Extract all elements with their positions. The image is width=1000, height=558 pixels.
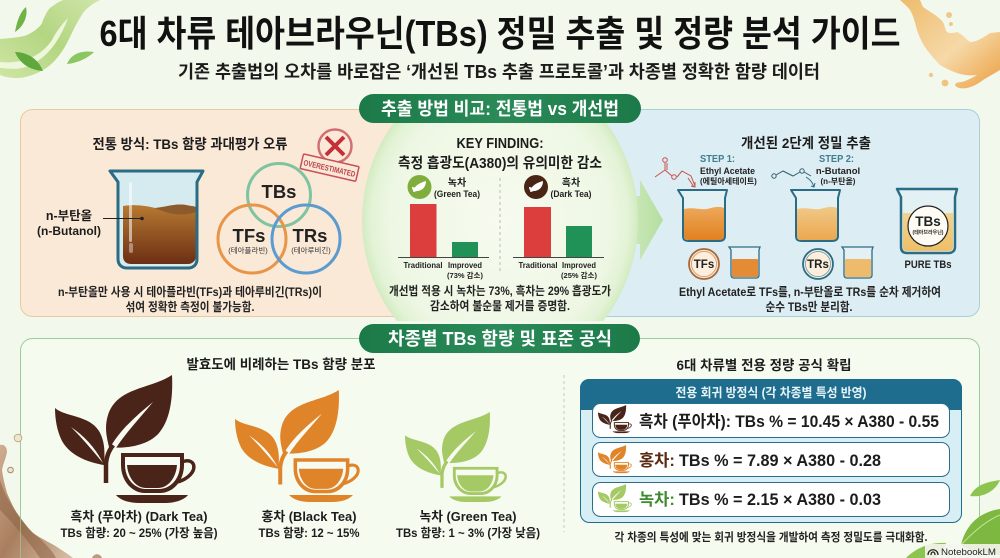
heading: key finding: KEY FINDING: [456, 136, 544, 152]
step 1 label: STEP 1: [700, 154, 735, 165]
label: n-butanol [37, 209, 144, 238]
icon: green tea leaf and cup [405, 412, 506, 502]
heading: formulas: 6대 차류별 전용 정량 공식 확립 [676, 357, 852, 373]
divider [499, 178, 501, 274]
panel: regression equations [580, 379, 962, 522]
step 2 label: n-Butanol [816, 166, 860, 177]
chart: green tea absorbance: Traditional [404, 260, 442, 270]
venn diagram: TBs TFs TRs: (테아플라빈) [228, 245, 268, 255]
label: green tea [434, 177, 480, 199]
row: black tea formula: 홍차: [639, 451, 675, 470]
icon: dark tea badge [524, 175, 548, 199]
heading: tbs distribution: 발효도에 비례하는 TBs 함량 분포 [186, 357, 376, 372]
caption: traditional: n-부탄올만 사용 시 테아플라빈(TFs)과 테아루비긴(TRs)이 [58, 284, 322, 299]
bottom-left milk tea splash [0, 434, 102, 558]
panel: traditional method [20, 110, 420, 316]
label: n-butanol: n-부탄올 [46, 209, 92, 223]
text: black tea content: TBs 함량: 12 ~ 15% [258, 525, 360, 540]
subtitle: 기존 추출법의 오차를 바로잡은 ‘개선된 TBs 추출 프로토콜’과 차종별 정확한 함량 데이터 [178, 62, 820, 82]
text: dark tea content: 흑차 (푸아차) (Dark Tea) [70, 509, 208, 524]
chart: dark tea absorbance: (25% 감소) [561, 270, 597, 280]
beaker: pure TBs: (테아브라우닌) [913, 229, 944, 236]
caption: improved [679, 284, 941, 314]
stamp: overestimated: OVERESTIMATED [303, 158, 356, 179]
text: green tea content [396, 509, 540, 540]
row: dark tea formula [592, 404, 950, 438]
step 1 label: Ethyl Acetate [700, 166, 755, 177]
label: pure TBs: PURE TBs [904, 259, 952, 271]
step 1 label: (에틸아세테이트) [700, 176, 757, 186]
chart: green tea absorbance [398, 204, 489, 280]
logo: NotebookLM [925, 544, 1000, 558]
chart: green tea absorbance: Improved [448, 260, 482, 270]
text: dark tea content [60, 509, 218, 540]
heading: key finding [398, 136, 602, 172]
beaker: pure TBs: TBs [915, 214, 941, 229]
label: n-butanol: (n-Butanol) [37, 224, 101, 238]
badge: TFs: TFs [694, 259, 714, 271]
caption: improved: Ethyl Acetate로 TFs를, n-부탄올로 TRs를 순차 제거하여 [679, 284, 941, 299]
icon: ethyl acetate molecule [655, 158, 695, 187]
icon: dark tea leaf and cup [55, 375, 194, 503]
label: green tea: 녹차 [448, 177, 466, 189]
badge: TFs [689, 249, 719, 279]
logo: NotebookLM: NotebookLM [941, 547, 996, 558]
divider [563, 375, 565, 532]
step 2 label: STEP 2: [819, 154, 854, 165]
bottom-right tea leaves [906, 480, 1000, 558]
label: dark tea [550, 176, 592, 199]
heading: traditional: 전통 방식: TBs 함량 과대평가 오류 [92, 136, 288, 152]
venn diagram: TBs TFs TRs: TRs [293, 225, 327, 246]
icon: black tea leaf and cup [235, 390, 358, 502]
text: green tea content: TBs 함량: 1 ~ 3% (가장 낮음) [396, 525, 540, 540]
section heading: tea type content: 차종별 TBs 함량 및 표준 공식 [388, 329, 612, 349]
badge: TRs: TRs [807, 259, 829, 271]
small beaker: TFs [729, 247, 760, 278]
chart: green tea absorbance: (73% 감소) [447, 270, 483, 280]
stamp: overestimated [300, 130, 359, 181]
text: black tea content: 홍차 (Black Tea) [262, 509, 356, 524]
label: dark tea: (Dark Tea) [550, 189, 592, 199]
venn diagram: TBs TFs TRs: TFs [233, 225, 265, 246]
beaker: step 1 [678, 190, 727, 241]
section heading: tea type content [359, 324, 640, 353]
small beaker: TRs [842, 247, 873, 278]
section heading: extraction comparison [359, 94, 641, 123]
text: green tea content: 녹차 (Green Tea) [420, 509, 516, 524]
text: dark tea content: TBs 함량: 20 ~ 25% (가장 높음) [60, 525, 218, 540]
title: 6대 차류 테아브라우닌(TBs) 정밀 추출 및 정량 분석 가이드 [100, 13, 900, 54]
caption: key finding: 개선법 적용 시 녹차는 73%, 흑차는 29% 흡광도가 [389, 283, 611, 298]
row: green tea formula: 녹차: [639, 490, 675, 509]
venn diagram: TBs TFs TRs: TBs [262, 181, 296, 202]
header: regression equations: 전용 회귀 방정식 (각 차종별 특성 반영) [676, 386, 866, 400]
caption: traditional: 섞여 정확한 측정이 불가능함. [126, 299, 254, 314]
chart: dark tea absorbance: Improved [562, 260, 596, 270]
label: green tea: (Green Tea) [434, 189, 480, 199]
caption: improved: 순수 TBs만 분리함. [766, 299, 852, 314]
caption: formulas: 각 차종의 특성에 맞는 회귀 방정식을 개발하여 측정 정밀도를 극대화함. [614, 530, 928, 544]
step 2 label: (n-부탄올) [821, 176, 856, 186]
caption: key finding [389, 283, 611, 313]
chart: dark tea absorbance: Traditional [518, 260, 558, 270]
top-right orange tea splash [900, 0, 1000, 88]
arrow: to improved method [610, 180, 663, 260]
icon: green tea badge [408, 175, 432, 199]
row: dark tea formula: 흑차 (푸아차): TBs % = 10.45 × A380 - 0.55 [639, 412, 939, 431]
caption: key finding: 감소하여 불순물 제거를 증명함. [430, 298, 570, 313]
step 2 label [816, 154, 860, 186]
label: dark tea: 흑차 [562, 176, 580, 189]
row: green tea formula: TBs % = 2.15 × A380 - 0.03 [679, 491, 881, 509]
panel: tea types and formulas [20, 338, 980, 558]
beaker: step 2 [791, 190, 840, 241]
step 1 label [700, 154, 757, 186]
badge: TRs [803, 249, 833, 279]
panel: improved method [580, 110, 980, 316]
row: black tea formula: TBs % = 7.89 × A380 - 0.28 [679, 452, 881, 470]
row: green tea formula [592, 482, 950, 516]
heading: improved: 개선된 2단계 정밀 추출 [741, 135, 871, 151]
icon: beaker with n-butanol [110, 171, 203, 268]
panel: key finding circle [362, 123, 638, 321]
beaker: pure TBs [897, 189, 957, 253]
heading: key finding: 측정 흡광도(A380)의 유의미한 감소 [398, 155, 602, 172]
top-left green tea splash [0, 0, 100, 78]
row: black tea formula [592, 442, 950, 476]
chart: dark tea absorbance [513, 207, 604, 280]
text: black tea content [258, 509, 360, 540]
caption: traditional [58, 284, 322, 314]
section heading: extraction comparison: 추출 방법 비교: 전통법 vs 개선법 [381, 99, 619, 119]
venn diagram: TBs TFs TRs: (테아루비긴) [291, 245, 331, 255]
icon: n-butanol molecule [772, 169, 815, 187]
venn diagram: TBs TFs TRs [218, 164, 340, 273]
